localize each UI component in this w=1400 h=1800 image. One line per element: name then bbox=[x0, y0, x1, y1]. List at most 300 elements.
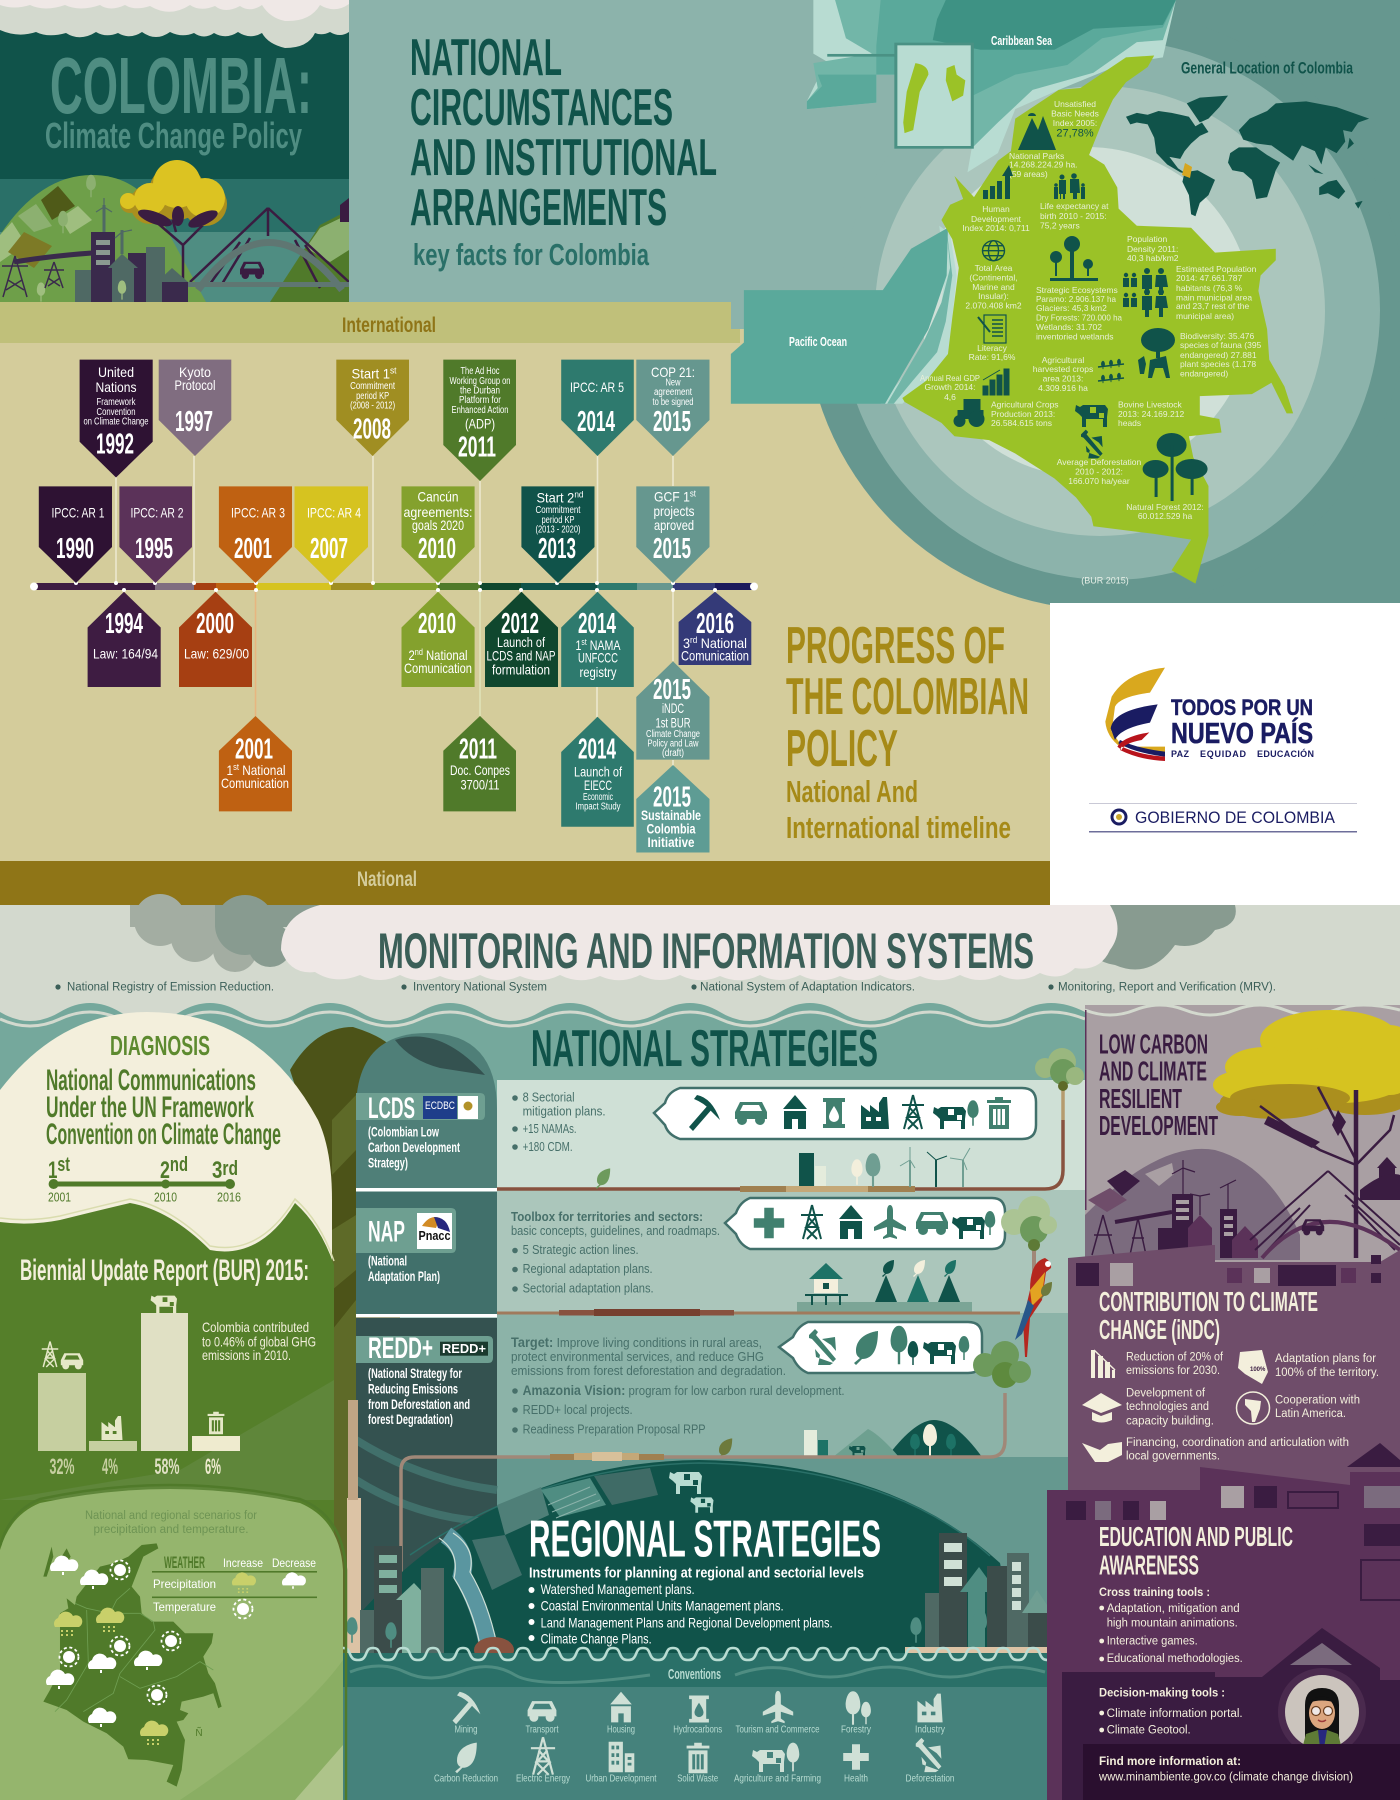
map: Colombia bbox=[902, 55, 1293, 584]
list: iNDC items: Development of bbox=[1126, 1387, 1206, 1399]
flag: 2013: Start 2 bbox=[536, 490, 578, 506]
flag: 2001 national bbox=[219, 716, 292, 811]
flag: GCF bbox=[636, 486, 710, 583]
flag: 2011 ADP: Enhanced Action bbox=[452, 405, 508, 416]
map statistics: area 2013: bbox=[1043, 374, 1083, 384]
flag: 2001 national: 1 bbox=[226, 762, 234, 778]
cloud band bbox=[0, 0, 349, 48]
map statistics: municipal area) bbox=[1176, 311, 1234, 321]
heading: low carbon: RESILIENT bbox=[1099, 1083, 1182, 1114]
sea shapes bbox=[731, 0, 1176, 404]
map statistics: 2.070.408 km2 bbox=[965, 300, 1022, 310]
flag: 2015 iNDC: (draft) bbox=[662, 748, 684, 759]
fields bbox=[1088, 1163, 1174, 1212]
label: LCDS: Carbon Development bbox=[368, 1139, 460, 1155]
flag: 2000: 2000 bbox=[196, 608, 234, 640]
logo: Todos por un nuevo pais: TODOS POR UN bbox=[1171, 695, 1313, 720]
parrot bbox=[1015, 1258, 1052, 1357]
heading: education: AWARENESS bbox=[1099, 1550, 1199, 1580]
flag: 1995: 1995 bbox=[135, 533, 173, 565]
bubble: REDD icons bbox=[779, 1322, 982, 1373]
map statistics: Basic Needs bbox=[1051, 109, 1099, 119]
map statistics: Human bbox=[982, 204, 1010, 214]
map statistics: Paramo: 2.906.137 ha bbox=[1036, 294, 1116, 304]
flag: 2000 bbox=[179, 592, 252, 687]
tree: row 3 bbox=[973, 1341, 1031, 1388]
flag: 2012: Launch of bbox=[497, 634, 545, 650]
map statistics: harvested crops bbox=[1033, 364, 1093, 374]
map statistics: 2013: 24.169.212 bbox=[1118, 409, 1184, 419]
cloud: dark right bbox=[1068, 905, 1236, 970]
chart: communications timeline: 2010 bbox=[154, 1190, 177, 1205]
map statistics: Estimated Population bbox=[1176, 264, 1257, 274]
flag: 2015 sustainable: 2015 bbox=[653, 781, 691, 813]
panel: conventions: Carbon Reduction bbox=[434, 1773, 498, 1785]
flag: 2016: 3 bbox=[683, 635, 691, 651]
label: International: International bbox=[342, 314, 436, 337]
list: regional instruments: Coastal Environmental Units Management plans. bbox=[541, 1598, 784, 1614]
label: LCDS: LCDS bbox=[368, 1092, 415, 1125]
flag: 1992: Framework bbox=[96, 397, 136, 408]
map statistics: Total Area bbox=[975, 263, 1013, 273]
flag: 1995 bbox=[119, 486, 192, 583]
row: LCDS details: +180 CDM. bbox=[523, 1139, 573, 1154]
list: iNDC items: Financing, coordination and articulation with bbox=[1126, 1437, 1349, 1449]
panel: scenarios bbox=[0, 1485, 346, 1800]
text: scenarios: National and regional scenarios for bbox=[85, 1510, 257, 1522]
text: global contribution: Colombia contributed bbox=[202, 1319, 309, 1335]
map statistics bbox=[920, 99, 1262, 521]
flag: 1992: on Climate Change bbox=[84, 417, 149, 428]
river bbox=[446, 1535, 488, 1645]
logo: Todos por un nuevo pais: EDUCACIÓN bbox=[1257, 748, 1314, 759]
illustration: landscape bbox=[0, 160, 349, 302]
map statistics: Production 2013: bbox=[991, 409, 1055, 419]
logo: Todos por un nuevo pais bbox=[1171, 695, 1314, 759]
list: iNDC items: Reduction of 20% of bbox=[1126, 1352, 1224, 1364]
chart: communications timeline: rd bbox=[222, 1158, 238, 1180]
map statistics: Population bbox=[1127, 234, 1167, 244]
list: iNDC items: technologies and bbox=[1126, 1401, 1209, 1413]
decision panel: Decision-making tools : bbox=[1099, 1687, 1225, 1699]
fields bbox=[472, 1468, 658, 1590]
heading: biennial report: Biennial Update Report (BUR) 2015: bbox=[20, 1254, 309, 1287]
list: cross training: Educational methodologies. bbox=[1107, 1653, 1243, 1665]
panel: national strategies background bbox=[0, 1003, 1085, 1800]
text: national communications: National Communications bbox=[46, 1064, 256, 1097]
map statistics: 75,2 years bbox=[1040, 220, 1080, 230]
list: cross training: Cross training tools : bbox=[1099, 1587, 1210, 1599]
list: monitoring items: National Registry of Emission Reduction. bbox=[67, 982, 274, 994]
flag: 2008: period KP bbox=[356, 391, 389, 402]
chart: communications timeline: st bbox=[57, 1154, 70, 1176]
flag: 1997: Protocol bbox=[174, 377, 216, 393]
text: global contribution: to 0.46% of global GHG bbox=[202, 1334, 316, 1350]
panel: contribution iNDC: 100% bbox=[1250, 1367, 1266, 1373]
decision panel: Climate Geotool. bbox=[1107, 1725, 1191, 1737]
flag: Cancun 2010 bbox=[402, 486, 475, 583]
icons: iNDC bbox=[1082, 1350, 1270, 1462]
flag: COP21: to be signed bbox=[652, 397, 694, 408]
flag: 2012: LCDS and NAP bbox=[486, 648, 556, 664]
flag: 2014 NAMA: 1 bbox=[576, 637, 583, 653]
panel: conventions: Tourism and Commerce bbox=[736, 1724, 820, 1736]
flag: COP21: COP 21: bbox=[651, 364, 695, 380]
map statistics: heads bbox=[1118, 418, 1141, 428]
flag: 2008 bbox=[336, 360, 409, 456]
flag: 1997: 1997 bbox=[175, 406, 213, 438]
chart: emissions by sector bbox=[38, 1296, 240, 1479]
flag: 2010: Comunication bbox=[404, 660, 472, 676]
map statistics: Insular): bbox=[978, 291, 1009, 301]
world map bbox=[1126, 96, 1369, 216]
list: regional instruments bbox=[528, 1565, 864, 1646]
flag: 2014 EIECC: 2014 bbox=[578, 734, 616, 766]
bubble: LCDS sector icons bbox=[654, 1088, 1036, 1139]
map statistics: 14.268.224.29 ha. bbox=[1009, 160, 1078, 170]
map statistics: 40,3 hab/km2 bbox=[1127, 253, 1179, 263]
panel: regional strategies bbox=[343, 1460, 1047, 1800]
flag: 2015 iNDC: Climate Change bbox=[646, 729, 700, 740]
row: NAP details: Toolbox for territories and sectors: bbox=[511, 1209, 703, 1224]
chart: communications timeline bbox=[48, 1154, 241, 1205]
label: NAP: NAP bbox=[368, 1216, 405, 1249]
flag: 1994: 1994 bbox=[105, 608, 143, 640]
flag: 2008: Commitment bbox=[350, 381, 395, 392]
title: regional strategies: REGIONAL STRATEGIES bbox=[529, 1511, 881, 1569]
flag: GCF: st bbox=[690, 488, 696, 498]
legend: weather: Temperature bbox=[153, 1600, 216, 1614]
flag: 2014 AR5: IPCC: AR 5 bbox=[570, 379, 624, 395]
flag: 2012 bbox=[485, 592, 558, 687]
flag: 2015 sustainable: Colombia bbox=[646, 821, 696, 837]
flag: 1997 bbox=[159, 360, 231, 456]
flag: 2001 national: st bbox=[233, 762, 239, 772]
flag: Cancun 2010: 2010 bbox=[418, 533, 456, 565]
flag: 2001 national: National bbox=[239, 762, 286, 778]
row: NAP details: 5 Strategic action lines. bbox=[523, 1242, 639, 1257]
map statistics: 2014: 47.661.787 bbox=[1176, 273, 1242, 283]
text: national communications: Convention on Climate Change bbox=[46, 1118, 281, 1151]
list: iNDC items: Latin America. bbox=[1275, 1408, 1346, 1420]
panel: conventions: Forestry bbox=[841, 1724, 872, 1736]
cloud: title bbox=[281, 905, 1118, 980]
row: REDD details: Target: Improve living conditions in rural areas, bbox=[511, 1334, 762, 1350]
city: left bbox=[346, 1498, 444, 1654]
label: LCDS: (Colombian Low bbox=[368, 1124, 439, 1140]
decision panel: Climate information portal. bbox=[1107, 1708, 1243, 1720]
map panel: rings bbox=[731, 0, 1400, 610]
panel: conventions: Hydrocarbons bbox=[673, 1724, 722, 1736]
map icons bbox=[954, 113, 1208, 501]
list: iNDC items: Cooperation with bbox=[1275, 1395, 1360, 1407]
heading: low carbon bbox=[1099, 1029, 1218, 1141]
footer: more info: www.minambiente.gov.co (climate change division) bbox=[1098, 1772, 1353, 1784]
flag: 2000: Law: 629/00 bbox=[184, 646, 249, 662]
flag: 2014 NAMA: NAMA bbox=[587, 637, 621, 653]
map statistics: Life expectancy at bbox=[1040, 201, 1109, 211]
panel: conventions: Urban Development bbox=[586, 1773, 657, 1785]
flag: 2013: Commitment bbox=[536, 505, 581, 516]
illustration: REDD ground bbox=[401, 1393, 1005, 1640]
label: NAP: Adaptation Plan) bbox=[368, 1268, 440, 1284]
row: LCDS details bbox=[497, 1048, 1084, 1192]
flag: 1990 bbox=[39, 486, 112, 583]
map statistics: Unsatisfied bbox=[1054, 99, 1096, 109]
illustration: city bbox=[2, 198, 188, 302]
map statistics: Dry Forests: 720.000 ha bbox=[1036, 313, 1122, 323]
label: REDD+: REDD+ bbox=[442, 1341, 486, 1356]
flag: 2014 NAMA: registry bbox=[580, 664, 616, 680]
map statistics: Rate: 91,6% bbox=[969, 352, 1016, 362]
national flags bbox=[88, 592, 751, 852]
legend: weather bbox=[152, 1553, 317, 1618]
heading: national circumstances: NATIONAL bbox=[410, 29, 562, 87]
map statistics: species of fauna (395 bbox=[1180, 340, 1262, 350]
list: monitoring items: Monitoring, Report and Verification (MRV). bbox=[1058, 982, 1276, 994]
flag: 2010 bbox=[402, 592, 475, 687]
list: cross training: Adaptation, mitigation and bbox=[1107, 1603, 1240, 1615]
row: NAP details: basic concepts, guidelines, and roadmaps. bbox=[511, 1223, 720, 1238]
row: REDD details bbox=[401, 1322, 1031, 1640]
flag: COP21 bbox=[636, 360, 710, 456]
heading: progress: THE COLOMBIAN bbox=[786, 668, 1029, 726]
flag: 2014 NAMA: 2014 bbox=[578, 608, 616, 640]
label: REDD+: from Deforestation and bbox=[368, 1396, 470, 1412]
flag: 2011 ADP: 2011 bbox=[458, 431, 496, 463]
heading: education bbox=[1099, 1521, 1293, 1580]
flag: Cancun 2010: Cancún bbox=[418, 488, 458, 504]
flag: 2015 iNDC bbox=[636, 661, 710, 760]
flag: 1990: 1990 bbox=[56, 533, 94, 565]
flag: COP21: New bbox=[666, 378, 681, 389]
map statistics: Index 2014: 0,711 bbox=[962, 223, 1030, 233]
chart: emissions by sector: 4% bbox=[102, 1454, 118, 1479]
flag: 2011 Conpes bbox=[443, 716, 516, 811]
logo: Todos por un nuevo pais: EQUIDAD bbox=[1200, 749, 1246, 759]
map statistics: inventoried wetlands bbox=[1036, 332, 1114, 342]
panel: BUR green bbox=[0, 1199, 346, 1800]
row: REDD details: emissions from forest deforestation and degradation. bbox=[511, 1363, 786, 1378]
flag: 1992: Nations bbox=[96, 379, 136, 395]
band: International bbox=[0, 302, 740, 343]
map labels bbox=[789, 33, 1353, 586]
chart: emissions by sector: 6% bbox=[205, 1454, 221, 1479]
panel: contribution iNDC bbox=[1068, 1245, 1400, 1490]
flag: 2014 EIECC: Launch of bbox=[574, 763, 622, 779]
flag: 1997: Kyoto bbox=[179, 364, 211, 380]
list: iNDC items: local governments. bbox=[1126, 1451, 1220, 1463]
flag: 2012: 2012 bbox=[501, 608, 539, 640]
flag: 2011 Conpes: 3700/11 bbox=[460, 776, 500, 792]
heading: iNDC bbox=[1099, 1286, 1318, 1345]
map statistics: Literacy bbox=[977, 343, 1008, 353]
map statistics: 4.309.916 ha bbox=[1038, 383, 1088, 393]
row: LCDS details: 8 Sectorial bbox=[523, 1090, 575, 1105]
row: LCDS details: +15 NAMAs. bbox=[523, 1121, 577, 1136]
label: NAP: (National bbox=[368, 1253, 407, 1269]
avatar bbox=[1278, 1668, 1366, 1756]
flag: 2014 NAMA bbox=[561, 592, 634, 687]
row: NAP details: Regional adaptation plans. bbox=[523, 1261, 653, 1276]
row: REDD details: Amazonia Vision: program for low carbon rural development. bbox=[523, 1382, 845, 1398]
map statistics: Density 2011: bbox=[1127, 244, 1178, 254]
map statistics: Bovine Livestock bbox=[1118, 400, 1183, 410]
heading: progress: International timeline bbox=[786, 810, 1011, 845]
map statistics: Annual Real GDP bbox=[920, 373, 980, 383]
label: REDD+: (National Strategy for bbox=[368, 1365, 462, 1381]
map statistics: Index 2005: bbox=[1053, 118, 1097, 128]
panel: low carbon bbox=[1085, 1005, 1400, 1270]
flag: 1992: Convention bbox=[96, 407, 136, 418]
chart: communications timeline: 2 bbox=[160, 1157, 173, 1184]
flag: COP21: agreement bbox=[654, 387, 692, 398]
chart: communications timeline: 3 bbox=[212, 1157, 225, 1184]
panel: diagnosis bbox=[0, 1012, 332, 1270]
panel: conventions: Deforestation bbox=[906, 1773, 955, 1785]
text: scenarios bbox=[85, 1510, 257, 1536]
timeline axis bbox=[30, 581, 758, 592]
label: LCDS bbox=[356, 1092, 485, 1171]
map statistics: 4,6 bbox=[944, 392, 956, 402]
list: regional instruments: Watershed Management plans. bbox=[541, 1581, 695, 1597]
map statistics: Biodiversity: 35.476 bbox=[1180, 331, 1254, 341]
flag: 2013: period KP bbox=[542, 515, 575, 526]
flag: GCF: GCF 1 bbox=[654, 488, 695, 504]
water band bbox=[343, 1645, 1047, 1689]
map statistics: 60.012.529 ha bbox=[1138, 511, 1192, 521]
flag: 2015 sustainable: Initiative bbox=[648, 834, 695, 850]
illustration: NAP village bbox=[497, 1250, 1034, 1316]
flag: 2011 ADP: The Ad Hoc bbox=[460, 366, 500, 377]
flag: 2016: 2016 bbox=[696, 608, 734, 640]
panel: conventions: Agriculture and Farming bbox=[734, 1773, 821, 1785]
row: REDD details: Readiness Preparation Proposal RPP bbox=[523, 1422, 706, 1437]
flag: 2011 ADP: the Durban bbox=[460, 386, 500, 397]
label: REDD+ bbox=[356, 1332, 493, 1427]
label: REDD+: forest Degradation) bbox=[368, 1411, 453, 1427]
heading: national strategies: NATIONAL STRATEGIES bbox=[531, 1020, 878, 1078]
flag: 2013: (2013 - 2020) bbox=[536, 524, 580, 536]
city: right bbox=[905, 1533, 1047, 1653]
list: iNDC items: capacity building. bbox=[1126, 1416, 1214, 1428]
flag: 2013 bbox=[521, 486, 594, 583]
text: global contribution bbox=[202, 1319, 316, 1363]
map statistics: main municipal area bbox=[1176, 292, 1252, 302]
flag: 2014 NAMA: UNFCCC bbox=[578, 650, 618, 666]
list: iNDC items: Adaptation plans for bbox=[1275, 1353, 1376, 1365]
cloud: darker left bbox=[215, 895, 320, 967]
map statistics: Strategic Ecosystems bbox=[1036, 285, 1118, 295]
heading: low carbon: AND CLIMATE bbox=[1099, 1056, 1207, 1087]
map statistics: Natural Forest 2012: bbox=[1126, 502, 1204, 512]
logo: Todos por un nuevo pais: PAZ bbox=[1171, 749, 1190, 759]
list: cross training: Interactive games. bbox=[1107, 1635, 1198, 1647]
flag: 2007: IPCC: AR 4 bbox=[307, 504, 361, 520]
map statistics: 166.070 ha/year bbox=[1068, 476, 1130, 486]
tree: row 1 bbox=[1035, 1048, 1084, 1091]
flag: 2016 bbox=[679, 592, 751, 665]
panel: cover bbox=[0, 0, 349, 302]
tree: yellow canopy bbox=[1213, 1010, 1400, 1258]
panel: conventions: Transport bbox=[526, 1724, 559, 1736]
map statistics: endangered) 27.881 bbox=[1180, 350, 1257, 360]
flag: 2013: nd bbox=[574, 490, 584, 500]
flag: 2014 EIECC: Impact Study bbox=[576, 801, 620, 812]
flag: 2016: rd bbox=[690, 635, 697, 645]
flag: GCF: projects bbox=[654, 503, 694, 519]
flag: 2013: 2013 bbox=[538, 533, 576, 565]
map statistics: (59 areas) bbox=[1009, 169, 1048, 179]
legend: weather: Precipitation bbox=[153, 1577, 216, 1591]
legend: weather: WEATHER bbox=[164, 1553, 205, 1572]
map statistics: Wetlands: 31.702 bbox=[1036, 322, 1102, 332]
flag: 2007 bbox=[294, 486, 368, 583]
note: source: (BUR 2015) bbox=[1081, 576, 1129, 586]
heading: national circumstances: AND INSTITUTIONAL bbox=[410, 129, 717, 187]
list: cross training bbox=[1099, 1587, 1243, 1665]
text: national communications bbox=[46, 1064, 281, 1151]
flag: 2015 iNDC: 2015 bbox=[653, 674, 691, 706]
flag: 2015 iNDC: iNDC bbox=[662, 700, 684, 716]
flag: 1995: IPCC: AR 2 bbox=[130, 504, 184, 520]
illustration: bridge bbox=[182, 208, 349, 290]
flag: 2008: 2008 bbox=[353, 414, 391, 446]
north marker: Ñ bbox=[195, 1726, 203, 1739]
flag: 2007: 2007 bbox=[310, 533, 348, 565]
subheading: key facts: key facts for Colombia bbox=[413, 237, 650, 272]
logo: Gobierno de Colombia: GOBIERNO DE COLOMBIA bbox=[1135, 808, 1336, 827]
list: monitoring items: Inventory National System bbox=[413, 982, 547, 994]
logo: seal bbox=[1110, 808, 1128, 826]
panel: conventions: Electric Energy bbox=[516, 1773, 571, 1785]
panel: conventions: Mining bbox=[454, 1724, 478, 1736]
flag: 1994: Law: 164/94 bbox=[93, 646, 158, 662]
heading: national circumstances: CIRCUMSTANCES bbox=[410, 79, 673, 137]
chart: communications timeline: nd bbox=[170, 1154, 188, 1176]
flag: 2001 AR3: IPCC: AR 3 bbox=[231, 504, 285, 520]
flag: GCF: 2015 bbox=[653, 533, 691, 565]
decision panel bbox=[1062, 1628, 1400, 1800]
flag: 2014 EIECC: EIECC bbox=[584, 777, 612, 793]
flag: 2008: (2008 - 2012) bbox=[350, 401, 395, 412]
Colombia marker on world map bbox=[1182, 163, 1192, 178]
flag: Cancun 2010: agreements: bbox=[404, 504, 472, 520]
flag: 2015 sustainable: Sustainable bbox=[641, 807, 701, 823]
chart: communications timeline: 2016 bbox=[217, 1190, 241, 1205]
map statistics: plant species (1.178 bbox=[1180, 359, 1256, 369]
flag: 2001 AR3: 2001 bbox=[234, 533, 272, 565]
footer: more info: Find more information at: bbox=[1099, 1756, 1241, 1768]
map statistics: and 23,7 rest of the bbox=[1176, 301, 1250, 311]
connector lines bbox=[116, 456, 673, 766]
list: monitoring items: National System of Adaptation Indicators. bbox=[700, 982, 915, 994]
list: iNDC items: 100% of the territory. bbox=[1275, 1367, 1379, 1379]
list: regional instruments: Instruments for planning at regional and sectorial levels bbox=[529, 1565, 864, 1582]
flag: 2011 Conpes: Doc. Conpes bbox=[450, 762, 510, 778]
flag: 2010: 2010 bbox=[418, 608, 456, 640]
map statistics: endangered) bbox=[1180, 369, 1228, 379]
city: purple bbox=[1092, 1157, 1400, 1258]
flag: 2014 AR5 bbox=[561, 360, 634, 456]
flag: 2016: Comunication bbox=[681, 647, 749, 663]
legend: weather: Decrease bbox=[272, 1556, 316, 1570]
timeline panel background bbox=[0, 302, 1050, 904]
map statistics: Agricultural Crops bbox=[991, 400, 1059, 410]
flag: 1992 bbox=[80, 360, 153, 478]
list: iNDC items bbox=[1126, 1352, 1379, 1463]
text: national communications: Under the UN Framework bbox=[46, 1091, 254, 1124]
